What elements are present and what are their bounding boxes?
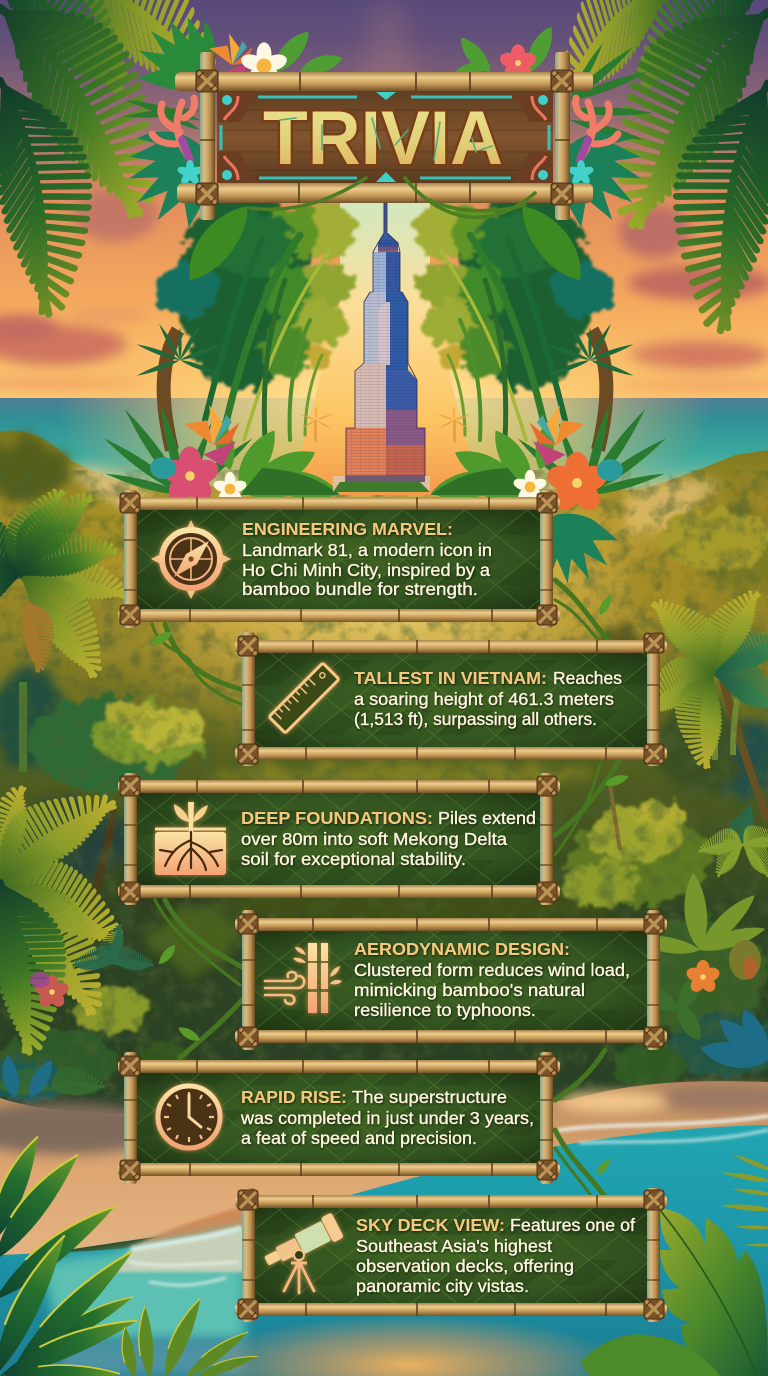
pale beach strips bbox=[70, 467, 720, 535]
panel: rapid rise bbox=[118, 1052, 560, 1184]
foreground foliage, bottom-right bbox=[580, 1152, 768, 1376]
wooden plaque bbox=[217, 90, 553, 185]
text: rapid rise: a feat of speed and precision. bbox=[241, 1128, 477, 1148]
central aperture of sky framed by the grove bbox=[290, 195, 480, 495]
large leaf bbox=[660, 1208, 768, 1376]
palm: right bbox=[638, 586, 768, 769]
top-right palm fronds bbox=[553, 0, 768, 333]
icon: telescope bbox=[260, 1212, 344, 1293]
text: rapid rise: was completed in just under 3 years, bbox=[240, 1108, 534, 1128]
jungle palms in the middle ground bbox=[0, 476, 768, 1112]
title text: TRIVIA bbox=[263, 96, 503, 181]
panel 1 frame bbox=[118, 490, 560, 628]
icon: clock bbox=[158, 1086, 220, 1148]
bamboo frame of title sign bbox=[175, 52, 593, 220]
text: tallest in vietnam: Reaches bbox=[553, 668, 622, 688]
title letter streaks bbox=[280, 118, 492, 160]
text: deep foundations: soil for exceptional stability. bbox=[241, 849, 466, 869]
text: aerodynamic design: Clustered form reduces wind load, bbox=[354, 960, 630, 980]
panel: aerodynamic design bbox=[235, 910, 667, 1050]
icon: wind and bamboo bbox=[265, 943, 342, 1013]
text: sky deck view: SKY DECK VIEW: bbox=[356, 1215, 505, 1235]
text: sky deck view: panoramic city vistas. bbox=[356, 1276, 529, 1296]
large leaf rib bbox=[660, 1210, 757, 1376]
text: aerodynamic design bbox=[354, 939, 630, 1020]
text: engineering marvel: Ho Chi Minh City, inspired by a bbox=[242, 560, 490, 580]
panel 3 frame bbox=[118, 773, 560, 905]
text: tallest in vietnam: TALLEST IN VIETNAM: bbox=[354, 668, 547, 688]
text: rapid rise: The superstructure bbox=[352, 1087, 507, 1107]
top-left palm fronds bbox=[0, 0, 220, 317]
sun glow bbox=[55, 280, 715, 540]
text: tallest in vietnam bbox=[354, 668, 622, 729]
panel: tallest in vietnam bbox=[235, 632, 667, 766]
text: sky deck view: observation decks, offering bbox=[356, 1256, 574, 1276]
panel 2 frame bbox=[235, 632, 667, 766]
text: rapid rise: RAPID RISE: bbox=[241, 1087, 347, 1107]
text: engineering marvel bbox=[242, 519, 492, 599]
text: sky deck view bbox=[356, 1215, 635, 1296]
sign foliage and flowers bbox=[122, 8, 653, 236]
golden central haze bbox=[55, 390, 715, 770]
jungle base bbox=[0, 431, 768, 1120]
Landmark 81 tower bbox=[333, 203, 430, 492]
beach and lower sea bbox=[0, 1081, 768, 1376]
sunset sky background bbox=[0, 0, 768, 400]
text: rapid rise bbox=[240, 1087, 534, 1148]
text: aerodynamic design: AERODYNAMIC DESIGN: bbox=[354, 939, 570, 959]
text: sky deck view: Southeast Asia's highest bbox=[356, 1236, 552, 1256]
text: tallest in vietnam: a soaring height of 461.3 meters bbox=[354, 689, 614, 709]
text: deep foundations: DEEP FOUNDATIONS: bbox=[241, 808, 433, 828]
text: deep foundations: over 80m into soft Mekong Delta bbox=[241, 829, 507, 849]
panel 6 frame bbox=[235, 1188, 667, 1322]
bamboo grove, left bbox=[101, 190, 357, 505]
flowers at the base of the grove bbox=[150, 405, 623, 515]
lower leaf bbox=[580, 1334, 720, 1376]
text: engineering marvel: Landmark 81, a modern icon in bbox=[242, 540, 492, 560]
text: tallest in vietnam: (1,513 ft), surpassing all others. bbox=[354, 709, 597, 729]
panel: sky deck view bbox=[235, 1188, 667, 1322]
background jungle trees bbox=[0, 440, 768, 1102]
panel 4 frame bbox=[235, 910, 667, 1050]
foliage mottling bbox=[0, 470, 768, 1100]
text: engineering marvel: bamboo bundle for strength. bbox=[242, 579, 478, 599]
vines linking the panels bbox=[148, 580, 630, 1197]
icon: ruler bbox=[269, 663, 339, 733]
text: aerodynamic design: mimicking bamboo's natural bbox=[354, 980, 585, 1000]
palm: upper left bbox=[0, 476, 130, 678]
icon: roots in soil bbox=[155, 802, 226, 875]
foreground foliage, bottom-left bbox=[0, 1131, 259, 1376]
text: sky deck view: Features one of bbox=[510, 1215, 635, 1235]
text: aerodynamic design: resilience to typhoons. bbox=[354, 1000, 536, 1020]
palm: lower left bbox=[0, 761, 139, 1055]
sea on the horizon bbox=[0, 398, 768, 498]
icon: compass bbox=[151, 520, 231, 599]
panel: engineering marvel bbox=[118, 490, 560, 628]
title sign bbox=[122, 8, 653, 236]
far right fronds bbox=[720, 1152, 768, 1247]
panel: deep foundations bbox=[118, 773, 560, 905]
small palms and plants bbox=[0, 805, 768, 1112]
panel 5 frame bbox=[118, 1052, 560, 1184]
monstera leaf beside first panel bbox=[532, 514, 618, 583]
text: engineering marvel: ENGINEERING MARVEL: bbox=[242, 519, 453, 539]
sign vines bbox=[250, 178, 535, 217]
text: deep foundations bbox=[241, 808, 536, 869]
text: deep foundations: Piles extend bbox=[438, 808, 536, 828]
bamboo grove, right bbox=[413, 190, 669, 505]
